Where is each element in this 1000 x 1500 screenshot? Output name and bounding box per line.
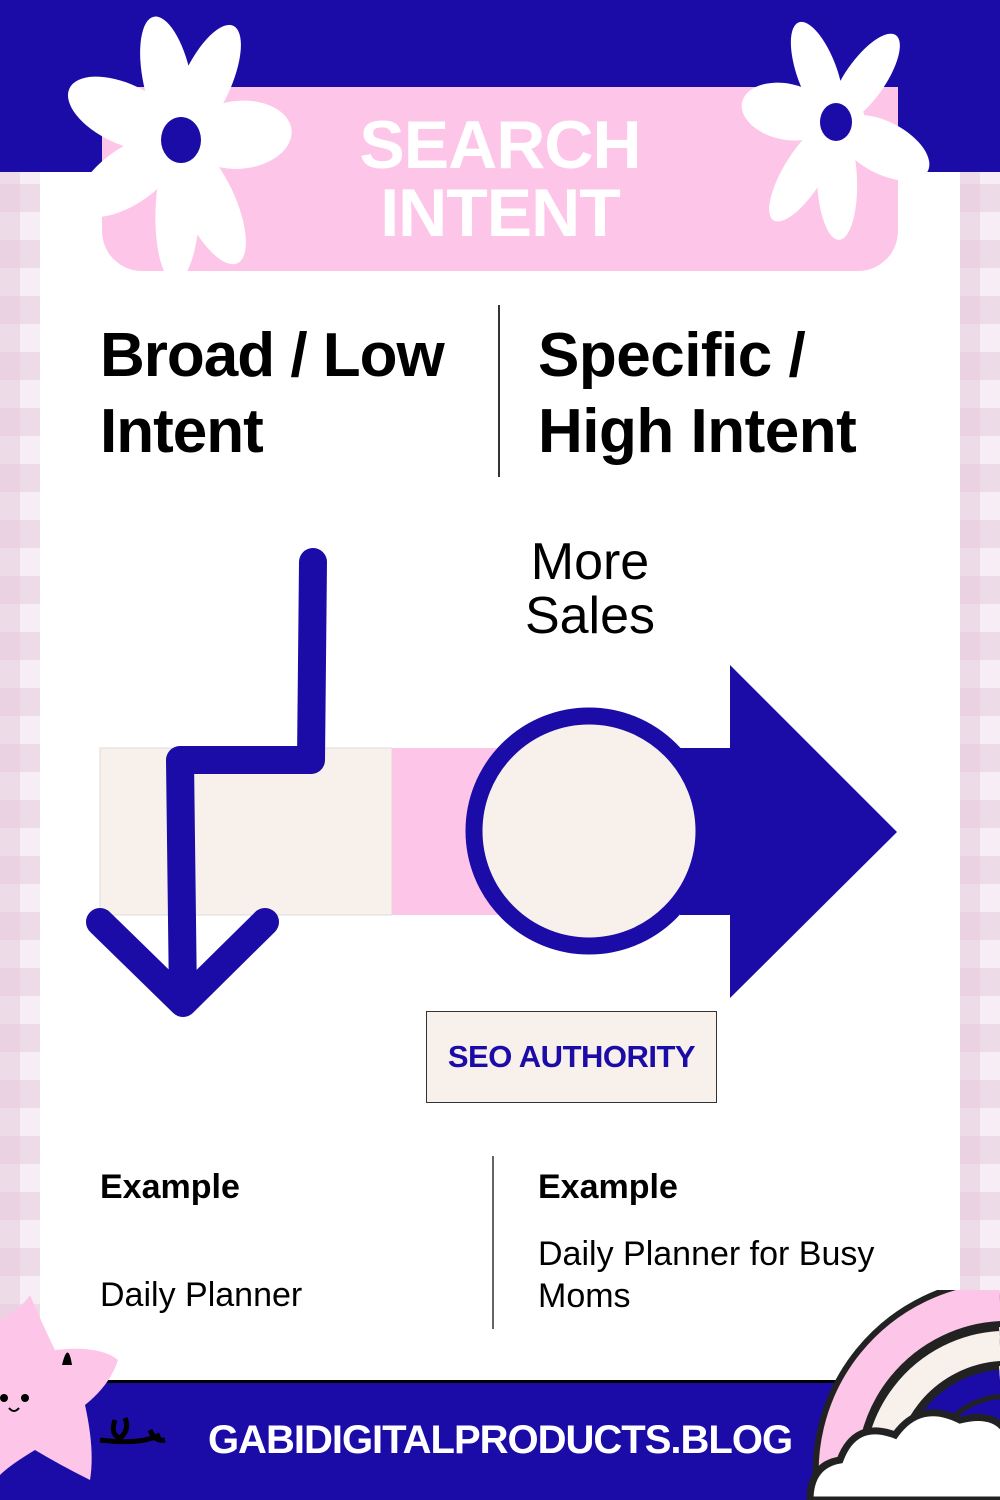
diagram: intent arrow — [86, 548, 897, 1017]
icon: left flower — [68, 16, 292, 271]
label: seo authority — [426, 1011, 717, 1103]
example left: Example — [100, 1168, 240, 1206]
icon: right flower — [742, 22, 930, 240]
beige block — [100, 748, 392, 915]
footer url: GABIDIGITALPRODUCTS.BLOG — [208, 1418, 792, 1462]
icon: pink star — [0, 1295, 166, 1480]
heading: specific / high intent: High Intent — [538, 397, 856, 466]
label: more sales: More — [531, 533, 649, 591]
example right: Example — [538, 1168, 678, 1206]
heading: broad / low intent: Broad / Low — [100, 321, 444, 390]
divider bottom — [492, 1156, 494, 1329]
heading: broad / low intent: Intent — [100, 397, 263, 466]
zigzag down arrow — [180, 562, 313, 1000]
footer bar — [0, 1380, 1000, 1500]
circle — [474, 716, 704, 946]
example left — [100, 1168, 302, 1314]
title text: SEARCH — [359, 107, 641, 183]
label: more sales — [525, 533, 655, 645]
example right — [538, 1168, 874, 1315]
white panel — [40, 160, 960, 1390]
heading: specific / high intent: Specific / — [538, 321, 805, 390]
example left: Daily Planner — [100, 1276, 302, 1314]
example right: Moms — [538, 1277, 631, 1315]
label: more sales: Sales — [525, 587, 655, 645]
title text: INTENT — [380, 175, 620, 251]
label: seo authority: SEO AUTHORITY — [448, 1039, 695, 1074]
heading: broad / low intent — [100, 321, 445, 466]
big blue arrow — [680, 665, 897, 998]
title banner — [102, 87, 898, 271]
top blue header bar — [0, 0, 1000, 172]
heading: specific / high intent — [538, 321, 856, 466]
example right: Daily Planner for Busy — [538, 1235, 874, 1273]
title text — [359, 107, 641, 251]
pink block — [392, 748, 512, 915]
divider top — [498, 305, 500, 477]
icon: rainbow and cloud — [806, 1290, 1000, 1500]
